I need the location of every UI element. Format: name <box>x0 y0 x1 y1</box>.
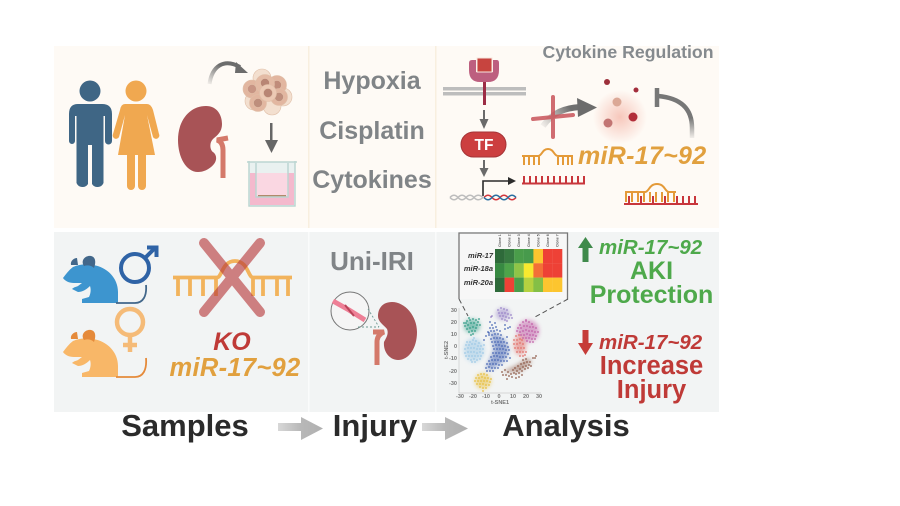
icon: transcription factor <box>461 132 506 157</box>
chart: heatmap inset <box>459 233 568 317</box>
icon: hairpin bound to target <box>624 184 698 204</box>
chart: heatmap inset: Clone 4 <box>527 234 531 247</box>
chart: t-SNE scatter plot <box>444 308 542 406</box>
text: KO: KO <box>213 328 251 356</box>
icon: crossed-out miRNA hairpin <box>173 243 292 312</box>
chart: heatmap inset: Clone 2 <box>508 234 512 247</box>
chart: t-SNE scatter plot: -20 <box>449 369 457 375</box>
text: AKI Protection: Protection <box>590 281 713 309</box>
text: Increase Injury <box>600 352 703 404</box>
icon: cytokine dots <box>593 79 647 144</box>
chart: t-SNE scatter plot: -20 <box>469 394 477 400</box>
chart: t-SNE scatter plot: 30 <box>536 394 542 400</box>
heading: samples: Samples <box>121 408 249 443</box>
heading: analysis: Analysis <box>502 408 630 443</box>
arrow: samples to injury <box>278 417 323 440</box>
arrow: cells to transwell <box>265 123 278 153</box>
icon: pri-miRNA strand <box>522 176 585 184</box>
icon: male mouse <box>63 256 146 303</box>
chart: heatmap inset: Clone 7 <box>556 234 560 247</box>
chart: t-SNE scatter plot: t-SNE2 <box>444 341 450 359</box>
icon: kidney injury <box>373 302 417 365</box>
icon: hairpin small <box>522 149 573 165</box>
text: Uni-IRI: Uni-IRI <box>330 246 414 276</box>
text: miR-17~92 knockout: miR-17~92 <box>170 354 300 382</box>
arrow: TF to DNA <box>480 160 488 177</box>
chart: t-SNE scatter plot: t-SNE1 <box>491 400 509 406</box>
icon: clamped vessel <box>331 292 379 330</box>
chart: t-SNE scatter plot: -30 <box>449 381 457 387</box>
chart: t-SNE scatter plot: 0 <box>497 394 501 400</box>
icon: DNA helix <box>450 195 516 200</box>
panel: bottom row background <box>54 232 719 412</box>
chart: t-SNE scatter plot: -10 <box>449 356 457 362</box>
arrow: kidney to cells <box>210 62 248 84</box>
chart: heatmap inset: miR-17 <box>468 251 494 260</box>
chart: heatmap inset: Clone 3 <box>517 234 521 247</box>
icon: promoter arrow <box>483 177 516 196</box>
chart: t-SNE scatter plot: 20 <box>451 320 457 326</box>
text: miR-17~92 top: miR-17~92 <box>578 142 706 170</box>
icon: man <box>69 80 112 187</box>
text: cytokines: Cytokines <box>312 166 432 194</box>
icon: woman <box>113 80 159 190</box>
icon: transcription factor: TF <box>475 137 493 154</box>
arrow: crossed activation <box>533 97 597 137</box>
chart: heatmap inset: miR-18a <box>464 264 493 273</box>
arrow: injury to analysis <box>422 417 468 440</box>
panel: top row background <box>54 46 719 228</box>
text: Increase Injury: Increase <box>600 352 703 380</box>
text: AKI Protection: AKI <box>630 257 673 285</box>
chart: t-SNE scatter plot: 10 <box>510 394 516 400</box>
heading: cytokine regulation: Cytokine Regulation <box>542 42 714 62</box>
arrow: inhibition <box>657 88 692 138</box>
text: miR-17~92 down: miR-17~92 <box>599 331 703 354</box>
text: Increase Injury: Injury <box>617 376 687 404</box>
text: hypoxia: Hypoxia <box>323 67 422 95</box>
chart: t-SNE scatter plot: 30 <box>451 308 457 314</box>
chart: t-SNE scatter plot: -10 <box>482 394 490 400</box>
icon: up arrow green <box>578 237 593 262</box>
chart: heatmap inset: miR-20a <box>464 278 493 287</box>
chart: t-SNE scatter plot: 0 <box>454 344 457 350</box>
icon: membrane receptor <box>443 58 526 105</box>
heading: injury: Injury <box>333 408 418 443</box>
icon: male symbol <box>121 247 156 282</box>
arrow: receptor to TF <box>480 110 488 129</box>
icon: female symbol <box>117 309 143 352</box>
text: miR-17~92 up: miR-17~92 <box>599 236 703 259</box>
chart: t-SNE scatter plot: 20 <box>523 394 529 400</box>
icon: cell cluster <box>243 69 292 115</box>
icon: kidney <box>178 106 228 178</box>
icon: transwell <box>247 161 297 206</box>
chart: t-SNE scatter plot: 10 <box>451 332 457 338</box>
chart: t-SNE scatter plot: -30 <box>456 394 464 400</box>
text: cisplatin: Cisplatin <box>319 117 425 145</box>
chart: heatmap inset: Clone 1 <box>498 234 502 247</box>
icon: female mouse <box>63 330 146 377</box>
chart: heatmap inset: Clone 5 <box>536 234 540 247</box>
chart: heatmap inset: Clone 6 <box>546 234 550 247</box>
icon: down arrow red <box>578 330 593 355</box>
text: AKI Protection <box>590 257 713 309</box>
